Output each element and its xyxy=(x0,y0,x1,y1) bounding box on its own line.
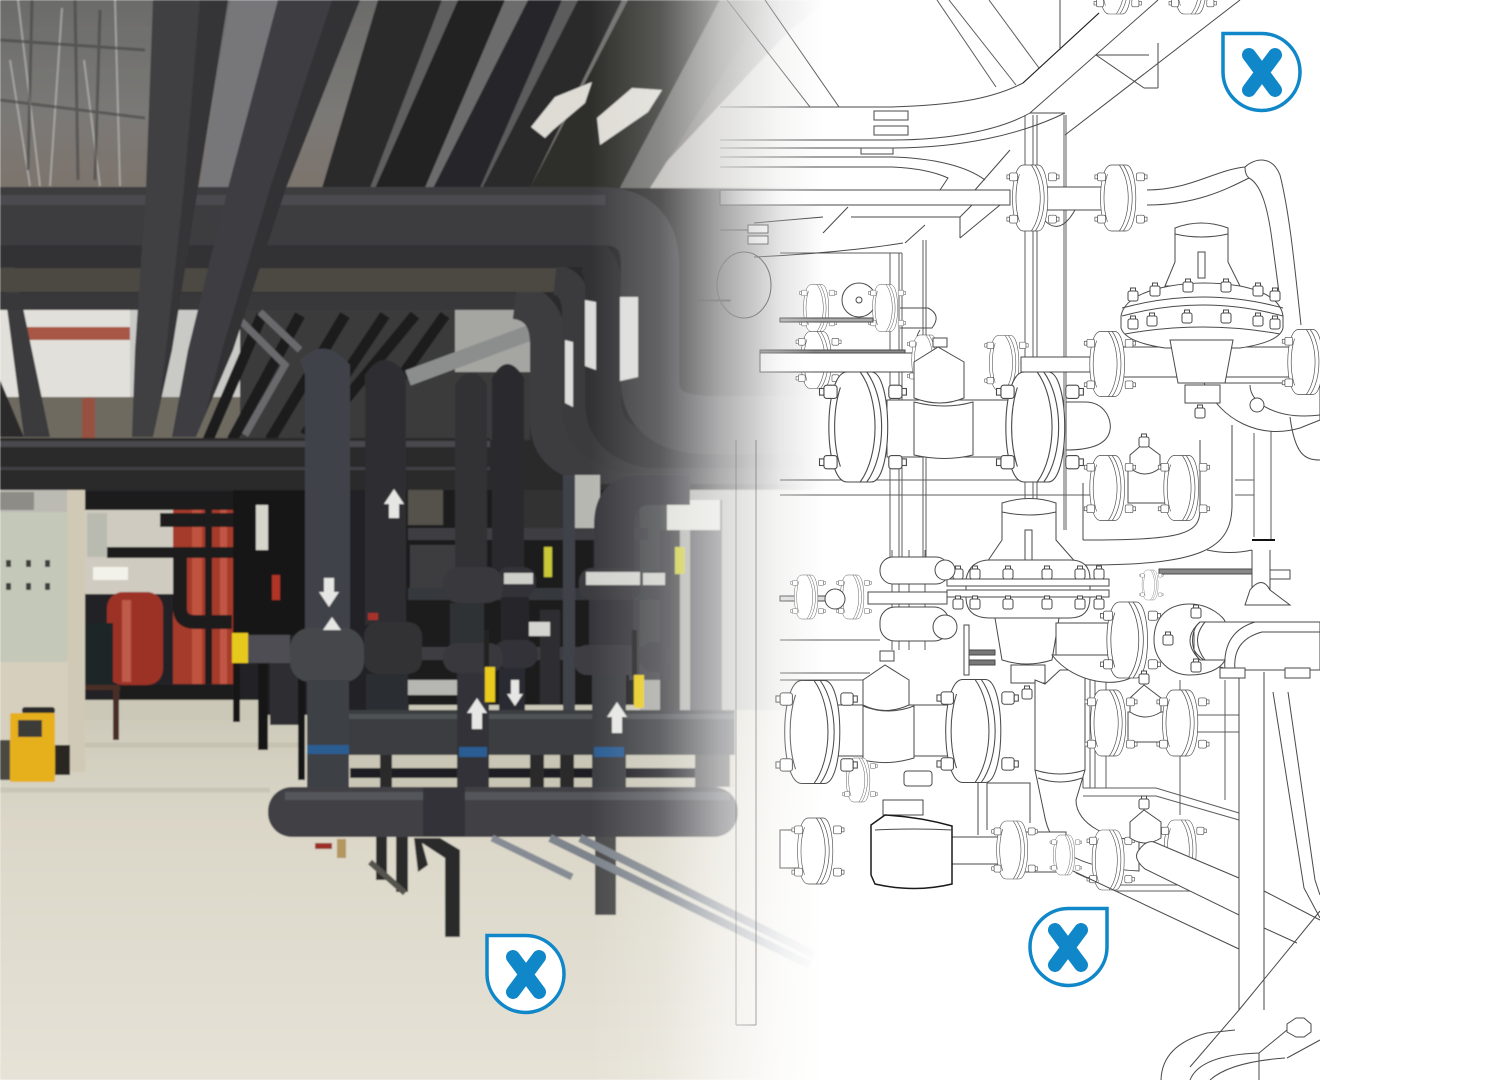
structural frame and truss xyxy=(727,0,1271,1025)
yellow dehumidifier xyxy=(0,707,70,782)
windows and beam xyxy=(0,255,245,438)
line drawing of pipework xyxy=(690,0,1334,1080)
dark band behind pipes xyxy=(0,188,830,500)
lower right strainers xyxy=(1085,671,1209,890)
big outlet and elbow flange xyxy=(1052,550,1320,682)
wall and control cabinet xyxy=(0,490,85,772)
long horizontal pipe xyxy=(0,438,490,490)
faint gauge left of drawing xyxy=(707,252,772,318)
floor gap frames under hot water pipe xyxy=(350,755,735,787)
back room xyxy=(84,490,409,780)
small valve group top left xyxy=(760,283,936,388)
icon: blue drop with X, bottom centre xyxy=(487,936,564,1012)
first pressure regulator xyxy=(1084,223,1334,431)
upper pipe run xyxy=(720,160,1301,325)
actuator and lower left flanges xyxy=(780,783,1082,888)
nested horizontal pipes bending down xyxy=(0,200,830,466)
main strainer with large flanges xyxy=(820,338,1110,482)
pipe labels xyxy=(565,297,638,407)
bottom diagonal pipes and column xyxy=(1073,668,1320,1067)
tall vertical tube and elbow xyxy=(1035,670,1139,871)
ceiling foil insulation xyxy=(0,0,830,190)
bottom right dome xyxy=(1161,1018,1320,1080)
second pressure regulator xyxy=(947,498,1109,699)
top flanges cut off by the edge xyxy=(1094,0,1216,14)
sloped ceiling pipes xyxy=(322,0,770,188)
yellow valve handles xyxy=(484,547,685,708)
stickers xyxy=(531,82,662,145)
floor xyxy=(0,700,830,1080)
left valves at mid height xyxy=(780,557,995,675)
main sloped pipes xyxy=(132,0,360,437)
foreground vertical pipes xyxy=(290,349,690,719)
horizontal pipes xyxy=(268,673,738,837)
small strainer and return elbow xyxy=(1083,417,1320,565)
lower strainer xyxy=(776,651,1018,802)
middle pipe run xyxy=(760,335,1090,390)
frames and clutter behind the pipes xyxy=(405,475,830,770)
white flow arrows and tags xyxy=(319,489,665,733)
icon: blue drop with X, top right xyxy=(1223,34,1300,110)
foil ducts under the pipes xyxy=(208,310,532,440)
blue bands xyxy=(307,745,624,757)
pipe stands and conduit xyxy=(315,837,815,965)
photo: plant room with insulated pipes xyxy=(0,0,830,1080)
white fade from photo to drawing xyxy=(590,0,825,1080)
cable tray xyxy=(720,0,1240,257)
icon: blue drop with X, bottom right xyxy=(1030,908,1107,985)
